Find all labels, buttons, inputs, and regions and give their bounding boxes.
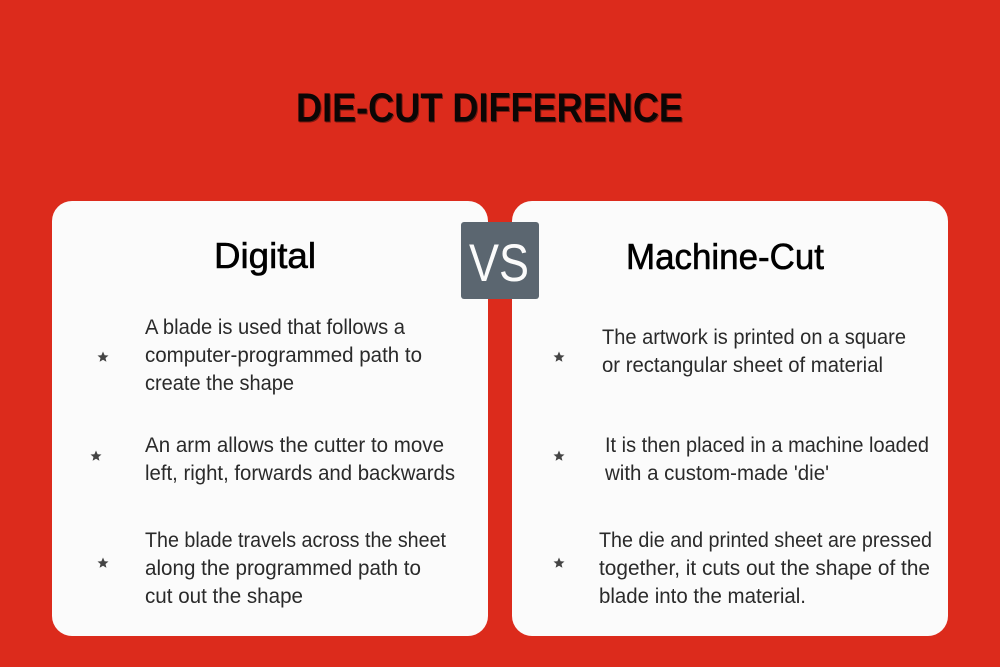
text block: machine-cut point 3 xyxy=(599,529,932,608)
panel: digital xyxy=(52,201,488,636)
text block: machine-cut point 2: with a custom-made 'die' xyxy=(604,462,829,485)
text block: machine-cut point 1 xyxy=(602,326,906,377)
title: DIE-CUT DIFFERENCE xyxy=(296,84,683,130)
text block: machine-cut point 2: It is then placed in a machine loaded xyxy=(605,434,929,457)
text block: digital point 2: An arm allows the cutter to move xyxy=(145,434,444,457)
vs badge xyxy=(461,222,539,299)
text block: digital point 1: A blade is used that follows a xyxy=(145,316,405,339)
icon: star bullet 1 xyxy=(98,352,108,362)
text block: machine-cut point 2 xyxy=(604,434,929,485)
text block: machine-cut point 3: together, it cuts out the shape of the xyxy=(599,557,930,580)
text block: machine-cut point 1: The artwork is printed on a square xyxy=(602,326,906,349)
text block: digital point 1: create the shape xyxy=(145,372,294,395)
icon: star bullet 5 xyxy=(554,450,564,461)
text block: digital point 3 xyxy=(145,529,446,608)
title: DIE-CUT DIFFERENCE xyxy=(297,86,684,132)
icon: star bullet 3 xyxy=(98,558,108,568)
text block: digital point 1 xyxy=(145,316,422,395)
panel: machine-cut xyxy=(512,201,948,636)
text block: digital point 2 xyxy=(145,434,455,485)
icon: star bullet 4 xyxy=(554,352,564,362)
text block: digital point 2: left, right, forwards and backwards xyxy=(145,462,455,485)
icon: star bullet 6 xyxy=(554,558,564,568)
heading: machine-cut: Machine-Cut xyxy=(626,236,824,277)
icon: star bullet 2 xyxy=(90,450,102,461)
text block: digital point 1: computer-programmed path to xyxy=(145,344,422,367)
text block: machine-cut point 1: or rectangular sheet of material xyxy=(602,354,883,377)
text block: digital point 3: cut out the shape xyxy=(145,585,303,608)
text block: machine-cut point 3: The die and printed sheet are pressed xyxy=(599,529,932,552)
text block: machine-cut point 3: blade into the material. xyxy=(599,585,806,608)
heading: digital: Digital xyxy=(214,235,316,276)
vs badge: VS xyxy=(469,234,529,293)
text block: digital point 3: along the programmed path to xyxy=(145,557,421,580)
text block: digital point 3: The blade travels across the sheet xyxy=(145,529,446,552)
